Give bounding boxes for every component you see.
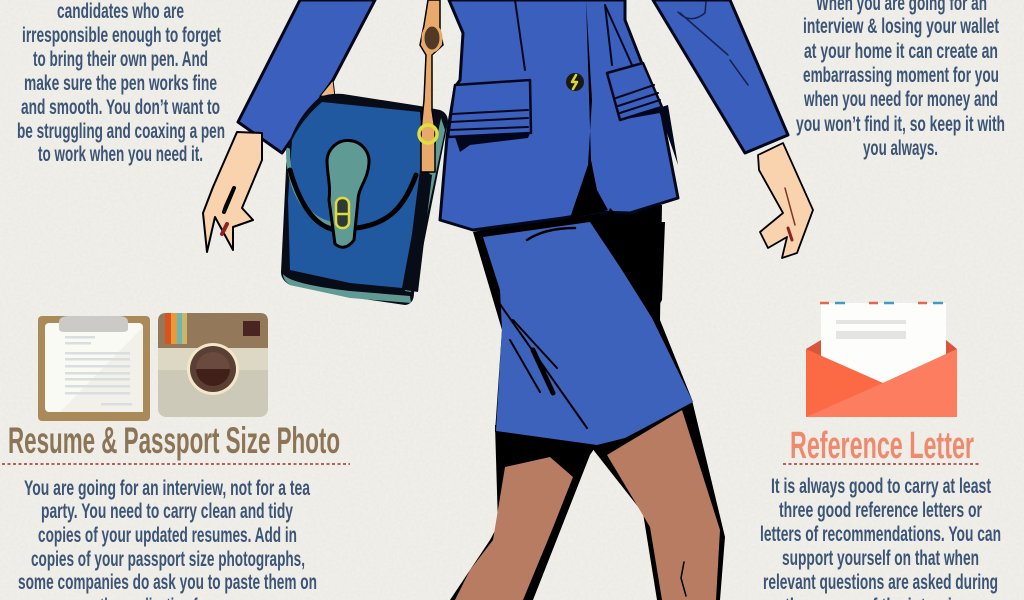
right leg <box>590 400 725 600</box>
text block: pen advice: and smooth. You don’t want to <box>21 96 220 119</box>
right sleeve <box>653 0 788 153</box>
heading: Resume & Passport Size Photo: Resume & Passport Size Photo <box>8 420 340 461</box>
text block: pen advice: be struggling and coaxing a pen <box>17 120 225 143</box>
text block: resume advice: some companies do ask you to paste them on <box>18 571 317 594</box>
text block: pen advice: make sure the pen works fine <box>24 72 217 95</box>
left sleeve <box>238 0 375 153</box>
text block: pen advice: to work when you need it. <box>38 143 203 166</box>
skirt <box>473 205 693 446</box>
text block: pen advice <box>17 0 225 166</box>
jacket <box>440 0 678 318</box>
text block: wallet advice <box>796 0 1005 160</box>
bag tab <box>327 140 369 247</box>
icon: clipboard <box>38 316 150 421</box>
text block: resume advice: party. You need to carry clean and tidy <box>41 500 293 523</box>
shoulder strap with buckle <box>419 0 443 172</box>
right hand <box>758 143 813 258</box>
text block: wallet advice: you always. <box>863 137 938 160</box>
handbag <box>281 94 448 305</box>
left leg <box>450 425 600 600</box>
left pocket <box>448 80 531 137</box>
jacket button <box>566 73 584 91</box>
text block: resume advice: copies of your passport size photographs, <box>31 548 305 571</box>
right pocket <box>607 63 662 120</box>
icon: camera <box>158 313 268 417</box>
text block: pen advice: candidates who are <box>57 0 184 23</box>
text block: resume advice <box>18 477 317 600</box>
text block: pen advice: to bring their own pen. And <box>33 48 208 71</box>
text block: reference letter advice <box>760 475 1001 600</box>
illustration: walking woman in blue suit <box>203 0 813 600</box>
icon: envelope with letter <box>806 303 957 417</box>
left arm sliver <box>320 80 335 97</box>
text block: resume advice: copies of your updated resumes. Add in <box>38 524 297 547</box>
text block: resume advice: You are going for an interview, not for a tea <box>24 477 310 500</box>
left hand <box>203 132 262 252</box>
text block: pen advice: irresponsible enough to forget <box>22 24 221 47</box>
